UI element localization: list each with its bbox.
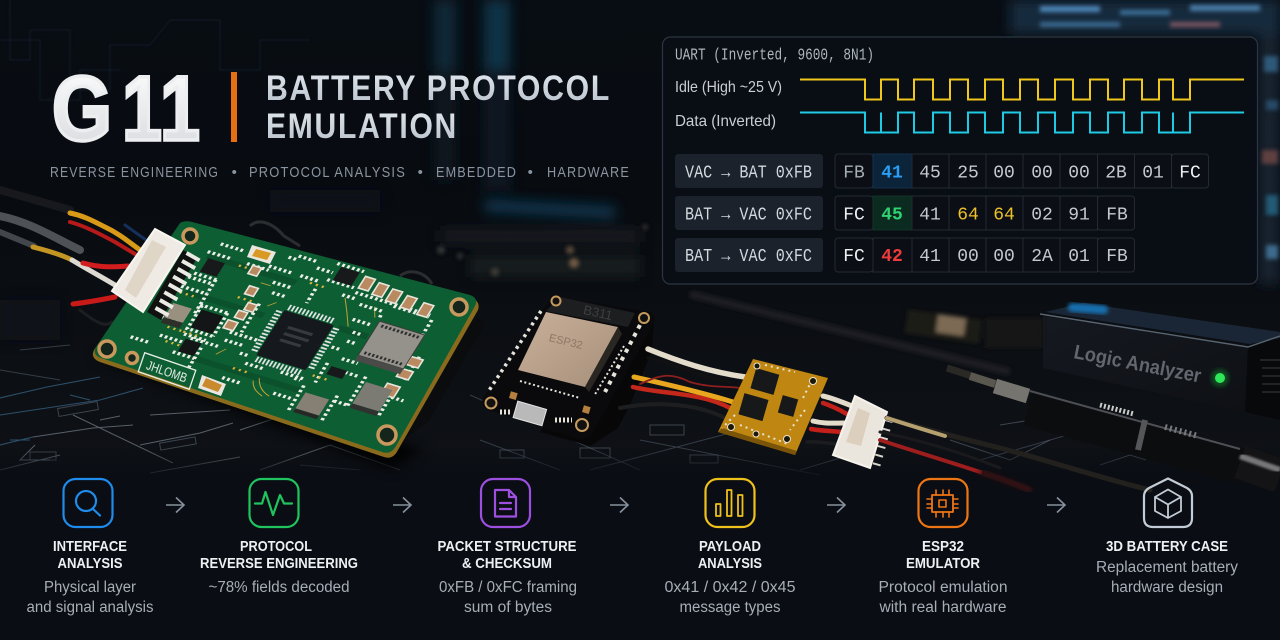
packet row 3: 42 — [881, 247, 903, 267]
step 6: 3D battery case — [1096, 478, 1238, 596]
step 4: payload analysis: message types — [680, 599, 781, 616]
header pads — [488, 311, 640, 420]
wires to connector — [807, 396, 852, 444]
yellow waveform — [800, 80, 1244, 100]
step 5: ESP32 emulator: EMULATOR — [906, 555, 980, 572]
packet row 1 — [675, 154, 1208, 188]
step 3: packet structure and checksum: sum of bytes — [464, 599, 552, 616]
ESP32 board with wires: B311 — [582, 302, 614, 323]
packet row 1: 00 — [1031, 164, 1053, 184]
title line 2: EMULATION — [266, 107, 458, 146]
packet row 3: FB — [1106, 247, 1128, 267]
blue schematic traces — [0, 377, 143, 445]
step 2: protocol reverse engineering: ~78% fields decoded — [208, 579, 350, 596]
interface board (yellow) with connector — [718, 359, 889, 468]
chips — [738, 368, 798, 421]
subtitle: • — [528, 164, 534, 181]
gold pads — [198, 245, 276, 396]
icon: chip — [918, 479, 968, 527]
step 3: packet structure and checksum: & CHECKSUM — [462, 555, 552, 572]
ESP32 board with wires: ESP32 — [548, 332, 584, 352]
step 5: ESP32 emulator: with real hardware — [878, 599, 1006, 616]
title: BATTERY PROTOCOL — [266, 69, 611, 108]
icon: pulse — [250, 479, 298, 527]
step 6: 3D battery case: 3D BATTERY CASE — [1106, 538, 1228, 555]
arrow 2 — [393, 498, 411, 512]
packet row 3: 01 — [1068, 247, 1090, 267]
logic analyzer box: Logic Analyzer — [1072, 341, 1203, 388]
packet row 1: FC — [1179, 164, 1201, 184]
mounting holes — [99, 229, 467, 444]
packet row 2 — [675, 196, 1134, 230]
packet row 1: 00 — [1068, 164, 1090, 184]
subtitle: • — [418, 164, 424, 181]
metal shield — [518, 312, 618, 387]
step 3: packet structure and checksum — [438, 479, 577, 616]
orange divider — [231, 72, 237, 142]
arrow 1 — [166, 498, 184, 512]
packet row 3 — [675, 238, 1134, 272]
packet row 3: 2A — [1031, 247, 1053, 267]
main chip — [250, 305, 340, 375]
blurred connector behind — [905, 309, 1043, 348]
step 5: ESP32 emulator — [878, 479, 1008, 616]
board bracket shadow — [380, 318, 486, 445]
uart heading: UART (Inverted, 9600, 8N1) — [675, 46, 874, 66]
subtitle: REVERSE ENGINEERING — [50, 164, 219, 181]
subtitle: • — [232, 164, 238, 181]
packet row 1: 01 — [1142, 164, 1164, 184]
antenna area — [546, 297, 635, 327]
step 6: 3D battery case: Replacement battery — [1096, 559, 1238, 576]
step 3: packet structure and checksum: PACKET STRUCTURE — [438, 538, 576, 555]
step 2: protocol reverse engineering: PROTOCOL — [240, 538, 312, 555]
arrow 3 — [610, 498, 628, 512]
packet row 3: 00 — [957, 247, 979, 267]
left wires — [0, 190, 146, 324]
logic analyzer box — [1040, 303, 1280, 420]
step 4: payload analysis: ANALYSIS — [698, 555, 762, 572]
white connector — [833, 396, 887, 468]
packet row 3: BAT → VAC 0xFC — [685, 247, 812, 267]
pads — [117, 222, 465, 438]
packet row 2: 64 — [993, 206, 1015, 226]
packet row 1: 25 — [957, 164, 979, 184]
connector pins — [876, 420, 889, 467]
packet row 2: 41 — [919, 206, 941, 226]
icon: hex cube — [1144, 478, 1192, 527]
idle label: Idle (High ~25 V) — [675, 79, 782, 96]
packet row 3: FC — [843, 247, 865, 267]
packet row 3: 41 — [919, 247, 941, 267]
subtitle: PROTOCOL ANALYSIS — [249, 164, 406, 181]
traces — [151, 256, 384, 399]
packet row 2: 64 — [957, 206, 979, 226]
step 1: interface analysis: ANALYSIS — [58, 555, 122, 572]
logo G11: 1 — [122, 58, 162, 160]
panel: UART signal and packets — [662, 37, 1258, 284]
step 1: interface analysis: INTERFACE — [53, 538, 127, 555]
ESP32 board with wires — [482, 296, 745, 446]
wires to interface board — [620, 349, 745, 418]
icon: document — [481, 479, 530, 527]
header title block — [50, 58, 630, 181]
icon: magnifier — [64, 479, 112, 527]
packet row 1: VAC → BAT 0xFB — [685, 164, 812, 184]
packet row 1: 2B — [1105, 164, 1127, 184]
packet row 3: 00 — [993, 247, 1015, 267]
main green PCB with connector and wires — [0, 190, 486, 470]
step 4: payload analysis — [664, 479, 796, 616]
cyan waveform — [800, 112, 1244, 132]
packet row 1: 45 — [919, 164, 941, 184]
arrow 4 — [827, 498, 845, 512]
step 6: 3D battery case: hardware design — [1111, 579, 1223, 596]
silver modules — [358, 321, 425, 369]
silkscreen label: JHLOMB — [145, 358, 189, 385]
packet row 2: 91 — [1068, 206, 1090, 226]
step 5: ESP32 emulator: Protocol emulation — [878, 579, 1008, 596]
packet row 1: 00 — [993, 164, 1015, 184]
step 2: protocol reverse engineering — [200, 479, 358, 596]
packet row 1: 41 — [881, 164, 903, 184]
step 5: ESP32 emulator: ESP32 — [922, 538, 964, 555]
board body — [93, 222, 479, 458]
icon: bars — [706, 479, 754, 527]
small black ICs — [200, 258, 225, 277]
logo G11: G — [52, 58, 112, 160]
white connector — [112, 229, 194, 316]
logo G11: 1 — [160, 58, 200, 160]
packet row 2: 45 — [881, 206, 903, 226]
logic analyzer cables — [880, 418, 1150, 490]
packet row 2: 02 — [1031, 206, 1053, 226]
packet row 2: FC — [843, 206, 865, 226]
logo G11 — [52, 58, 200, 160]
subtitle: EMBEDDED — [436, 164, 517, 181]
step 4: payload analysis: PAYLOAD — [699, 538, 761, 555]
arrow 5 — [1047, 498, 1065, 512]
data label: Data (Inverted) — [675, 113, 776, 130]
tan capacitors — [206, 246, 458, 399]
packet row 1: FB — [843, 164, 865, 184]
step 1: interface analysis — [26, 479, 154, 616]
step 2: protocol reverse engineering: REVERSE ENGINEERING — [200, 555, 358, 572]
step 1: interface analysis: Physical layer — [44, 579, 136, 596]
step 4: payload analysis: 0x41 / 0x42 / 0x45 — [664, 579, 796, 596]
probe cable — [947, 368, 1280, 476]
step 1: interface analysis: and signal analysis — [26, 599, 154, 616]
subtitle — [50, 164, 630, 181]
step 3: packet structure and checksum: 0xFB / 0xFC framing — [439, 579, 577, 596]
packet row 2: BAT → VAC 0xFC — [685, 206, 812, 226]
packet row 2: FB — [1106, 206, 1128, 226]
subtitle: HARDWARE — [547, 164, 630, 181]
